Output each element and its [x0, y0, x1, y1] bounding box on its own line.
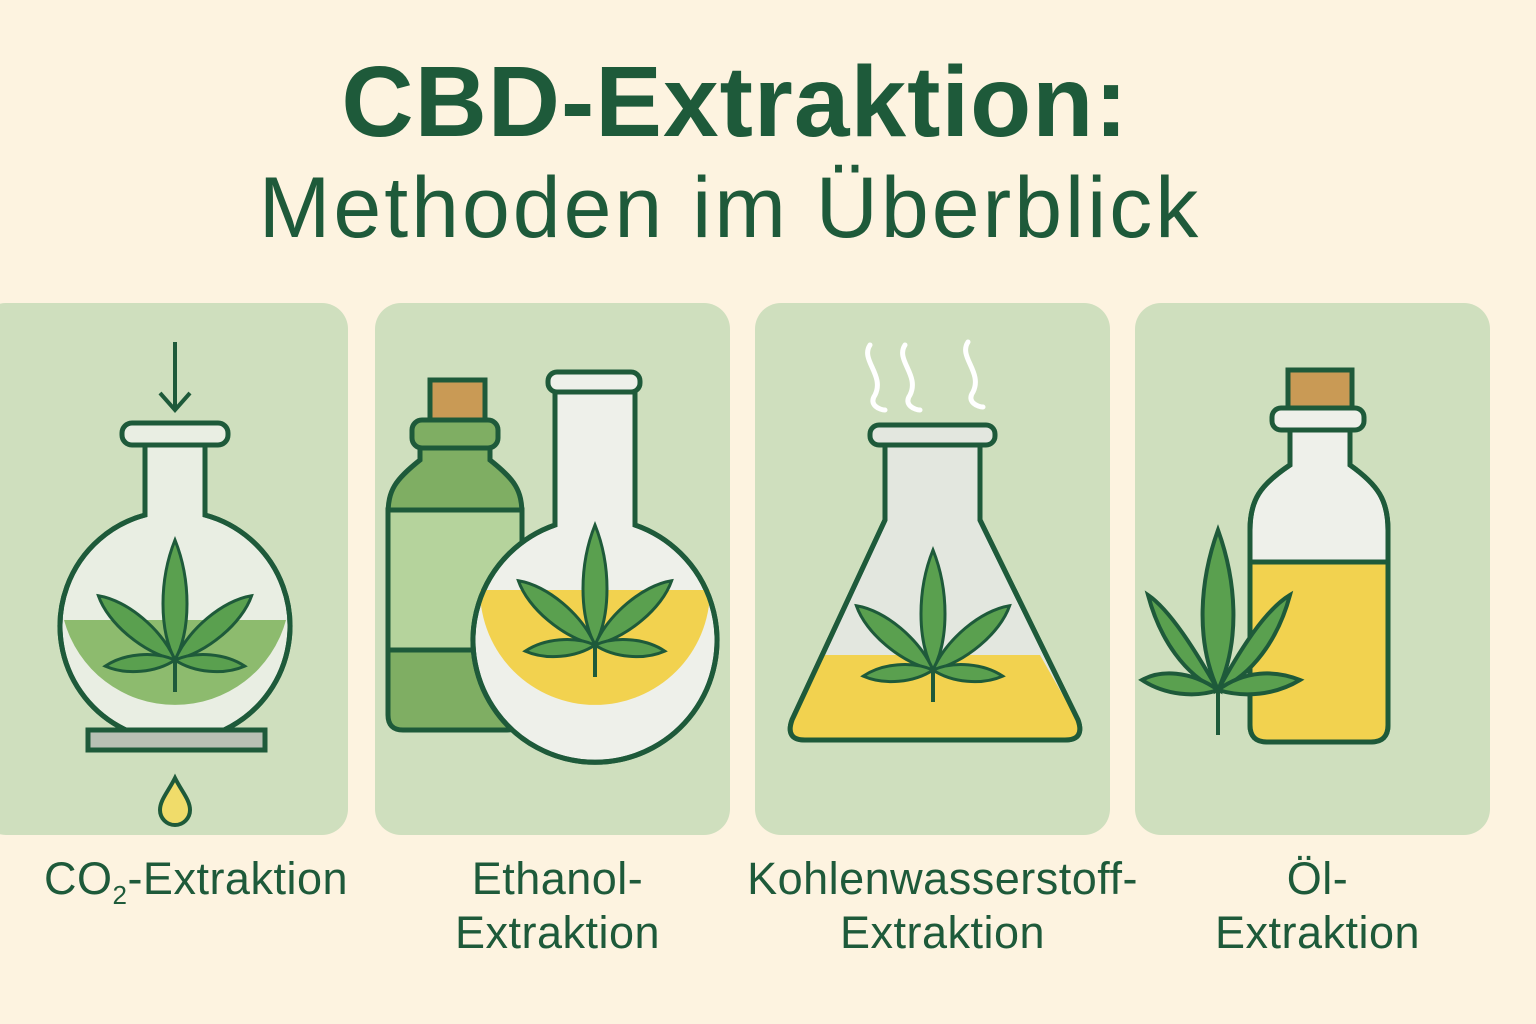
title: CBD-Extraktion: [341, 46, 1129, 158]
panel: CO2 [0, 303, 348, 835]
icon: erlenmeyer flask [790, 425, 1080, 740]
label: Kohlenwasserstoff [747, 853, 1138, 958]
subtitle: Methoden im Überblick [259, 160, 1201, 256]
label: CO2: CO2-Extraktion [44, 853, 348, 910]
icon: green bottle [388, 380, 522, 730]
label: Ethanol: Extraktion [455, 907, 660, 958]
panel: Ethanol [375, 303, 730, 835]
icon: oil bottle [1250, 370, 1388, 742]
icon: round flask yellow [473, 372, 717, 762]
panel: Öl [1135, 303, 1490, 835]
label: Ethanol: Ethanol- [472, 853, 643, 904]
label: Ethanol [455, 853, 660, 958]
icon: leaf [1142, 530, 1300, 735]
panel: Kohlenwasserstoff [755, 303, 1110, 835]
label: Öl [1215, 853, 1420, 958]
icon: steam [868, 342, 983, 410]
label: Kohlenwasserstoff: Extraktion [840, 907, 1045, 958]
label: Öl: Extraktion [1215, 907, 1420, 958]
label: Kohlenwasserstoff: Kohlenwasserstoff- [747, 853, 1138, 904]
label: Öl: Öl- [1287, 853, 1348, 904]
icon: arrow down [160, 342, 190, 410]
icon: round flask [60, 423, 290, 825]
